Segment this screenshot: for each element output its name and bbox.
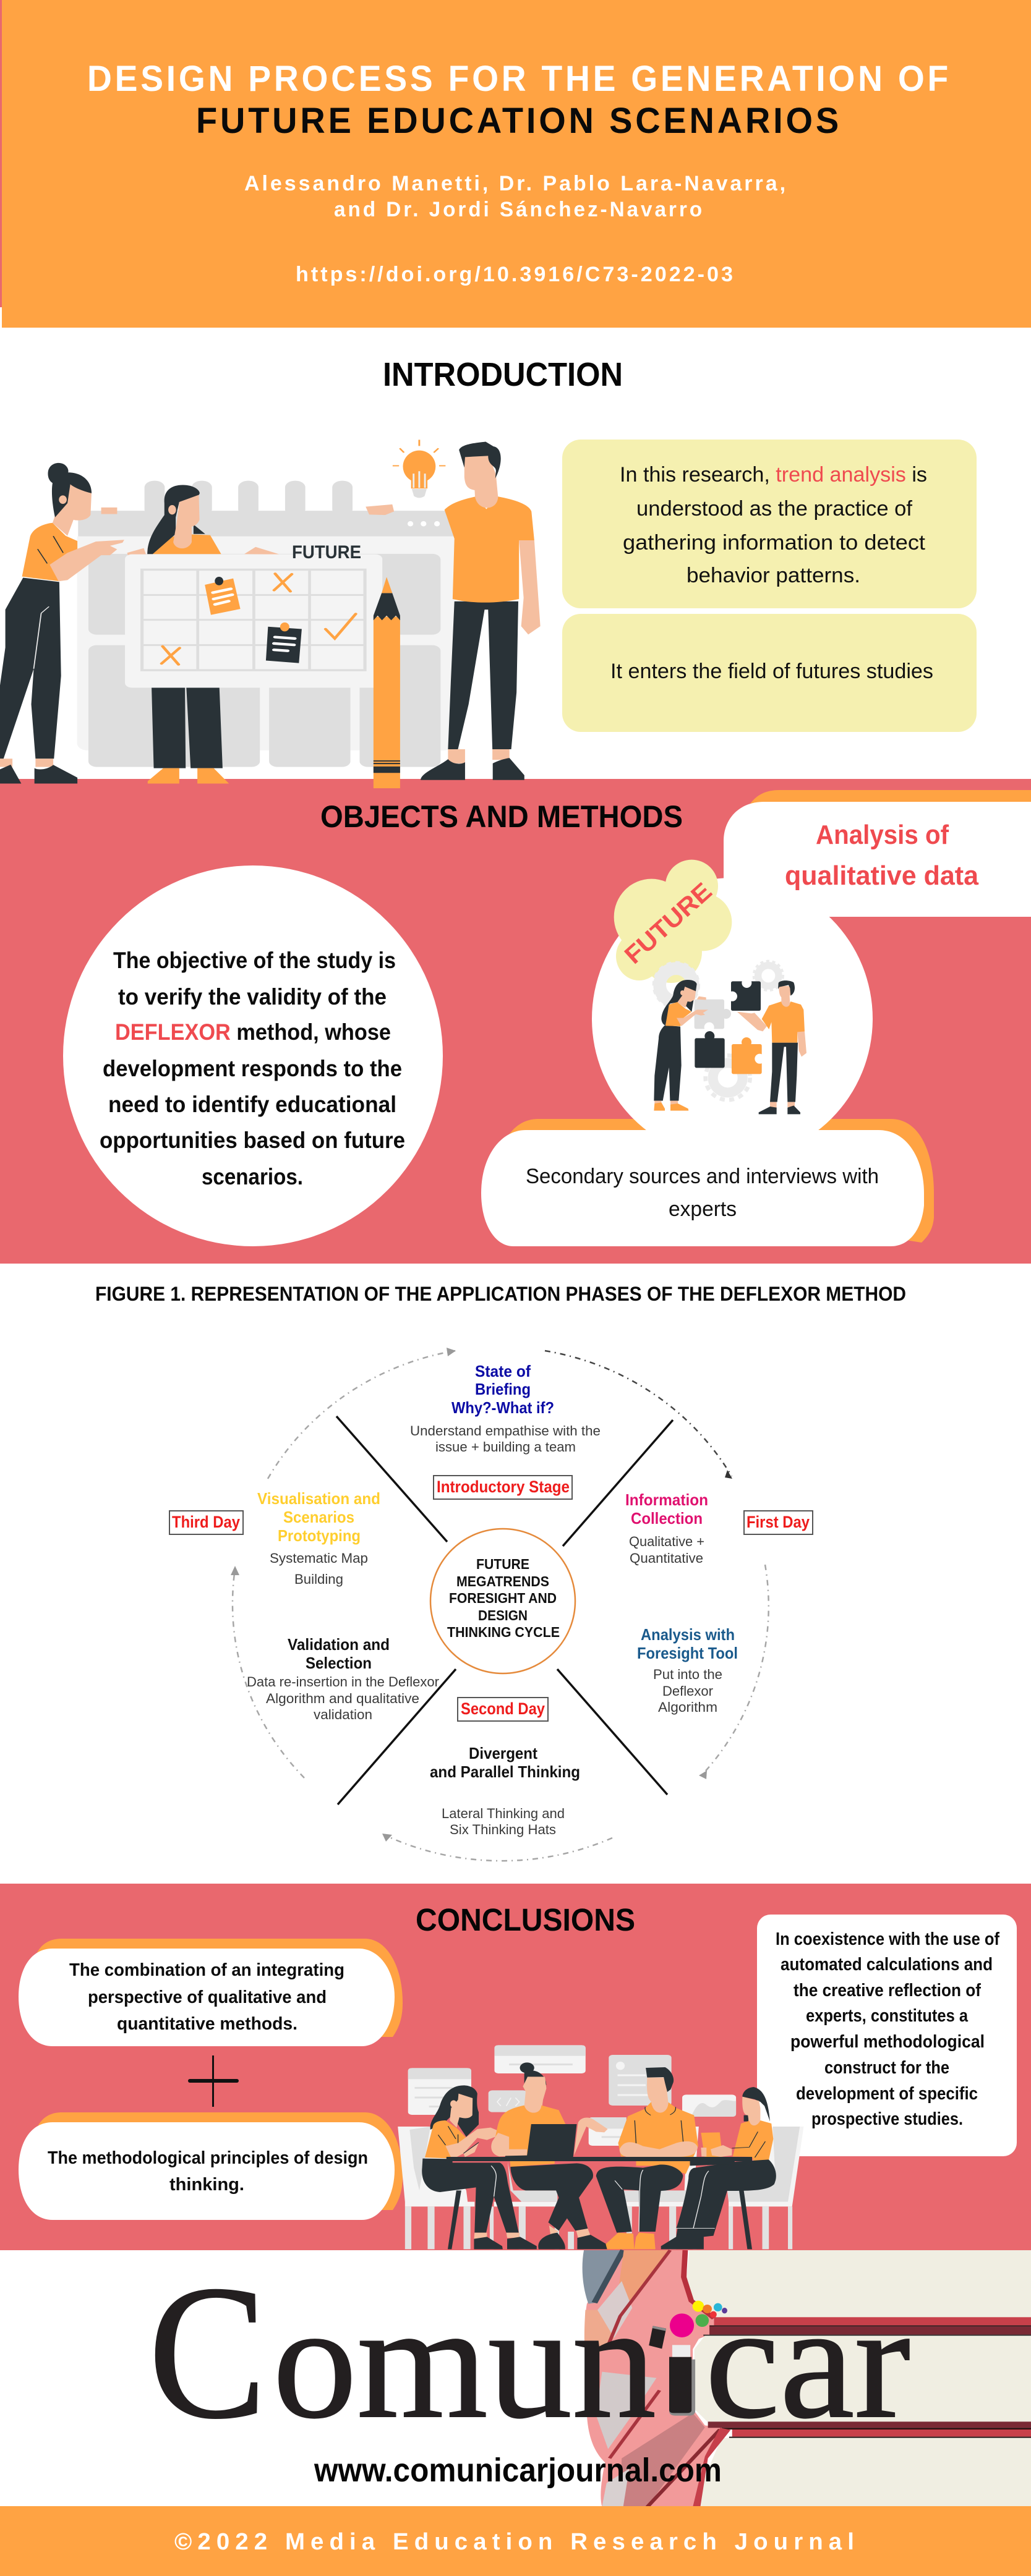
logo: Comunicar: C [148,2247,267,2459]
phase: visualisation and prototyping: Systematic Map [270,1550,368,1566]
calendar label: FUTURE: FUTURE [292,542,361,563]
phase: validation and selection: Data re-insertion in the Deflexor [247,1674,439,1690]
phase: state of briefing [410,1362,601,1455]
person: right woman with phone [661,2087,776,2249]
callout: combination of methods: perspective of qualitative and [88,1987,327,2007]
person: man with hoodie [596,2067,698,2249]
phase: analysis with foresight tool: Foresight Tool [637,1644,738,1662]
logo: Comunicar: omun [273,2271,656,2452]
phase: analysis with foresight tool: Algorithm [658,1699,717,1715]
phase: divergent and parallel thinking: Lateral Thinking and [442,1806,565,1821]
cycle arrows [231,1348,769,1861]
callout: coexistence of calculations and reflection: prospective studies. [811,2109,963,2129]
callout: coexistence of calculations and reflection [757,1915,1017,2156]
panel: bottom card backing [497,1119,934,1243]
pink section background: objects and methods [0,779,1031,1264]
phase: validation and selection: Algorithm and qualitative [266,1691,419,1706]
callout: methodological principles: thinking. [169,2175,244,2195]
phase: validation and selection: Selection [306,1654,372,1672]
center circle: THINKING CYCLE [447,1624,560,1640]
center circle: FUTURE [476,1556,529,1572]
callout: futures studies: It enters the field of futures studies [610,660,933,683]
callout: secondary sources: experts [669,1197,737,1221]
panel: objective circle: need to identify educational [108,1092,396,1117]
title [87,59,951,141]
panel: objective circle [63,865,443,1246]
phase: divergent and parallel thinking: Six Thinking Hats [450,1822,556,1837]
phase: visualisation and prototyping [257,1489,380,1587]
panel: objective circle: The objective of the study is [113,948,396,973]
logo: Comunicar: i [674,2345,695,2427]
chairs [398,2127,803,2249]
conclusions heading: CONCLUSIONS [416,1902,635,1937]
phase: analysis with foresight tool: Deflexor [662,1683,713,1699]
header banner [0,0,1031,328]
callout: analysis of qualitative data [724,790,1031,917]
logo: Comunicar: car [705,2271,910,2452]
person: left woman [422,2085,537,2249]
chart: deflexor method cycle [169,1348,813,1861]
callout: coexistence of calculations and reflection: automated calculations and [781,1955,993,1975]
callout: methodological principles: The methodological principles of design [48,2148,368,2168]
illustration: team meeting at a table [398,2045,803,2249]
footer banner [0,2506,1031,2576]
plus sign [188,2055,239,2107]
person: woman [654,980,708,1111]
cloud label: FUTURE: FUTURE [620,878,717,969]
callout: coexistence of calculations and reflection: development of specific [796,2084,978,2104]
phase: state of briefing: issue + building a team [435,1439,576,1455]
callout: secondary sources: Secondary sources and interviews with [526,1165,879,1188]
phase: state of briefing: Why?-What if? [451,1398,554,1417]
person: second woman with laptop [491,2062,610,2249]
phase: divergent and parallel thinking: Divergent [469,1744,537,1762]
phase: information collection [625,1490,708,1566]
phase: state of briefing: State of [475,1362,531,1380]
logo: Comunicar [148,2247,910,2459]
pink section background: conclusions [0,1884,1031,2250]
person: woman with bun pointing [0,463,124,783]
phase: information collection: Qualitative + [629,1534,704,1549]
doi link: https://doi.org/10.3916/C73-2022-03 [296,263,735,286]
callout: coexistence of calculations and reflection: the creative reflection of [794,1981,981,2000]
callout: trend analysis definition [562,440,977,608]
gears [654,961,783,1100]
callout: futures studies [562,614,977,732]
title: FUTURE EDUCATION SCENARIOS [196,101,842,141]
callout: analysis of qualitative data: Analysis of [816,820,949,850]
callout: coexistence of calculations and reflection: experts, constitutes a [806,2006,969,2026]
floating panels [408,2045,736,2146]
figure caption: FIGURE 1. REPRESENTATION OF THE APPLICATION PHASES OF THE DEFLEXOR METHOD [95,1283,906,1305]
phase: information collection: Information [625,1490,708,1509]
center circle: MEGATRENDS [456,1573,549,1589]
icon: usb stick and colour dots [649,2301,727,2416]
person: man [737,980,806,1114]
callout: combination of methods [19,1939,403,2046]
person: standing man [366,441,541,780]
callout: methodological principles [19,2112,403,2220]
callout: combination of methods: The combination of an integrating [69,1960,344,1980]
person: middle woman legs [148,687,229,783]
introduction heading: INTRODUCTION [383,356,623,393]
callout: combination of methods: quantitative methods. [117,2014,297,2034]
callout: trend analysis definition: In this research, trend analysis is [620,463,927,487]
callout: trend analysis definition: behavior patterns. [687,564,860,587]
authors: and Dr. Jordi Sánchez-Navarro [334,198,704,221]
cloud [614,860,732,983]
callout: trend analysis definition: understood as the practice of [636,497,913,521]
phase: information collection: Quantitative [630,1550,703,1566]
center circle: DESIGN [478,1607,528,1623]
label: introductory stage: Introductory Stage [437,1477,570,1496]
board with planning grid [125,555,382,687]
phase: visualisation and prototyping: Scenarios [283,1508,354,1526]
authors: Alessandro Manetti, Dr. Pablo Lara-Navarra, [244,172,788,195]
website link: www.comunicarjournal.com [314,2452,722,2489]
center circle [430,1529,575,1673]
callout: coexistence of calculations and reflection: In coexistence with the use of [776,1929,999,1949]
footer banner: ©2022 Media Education Research Journal [174,2529,860,2555]
phase: information collection: Collection [631,1509,703,1528]
phase: divergent and parallel thinking: and Parallel Thinking [430,1762,580,1781]
phase: validation and selection: validation [314,1707,372,1722]
title: DESIGN PROCESS FOR THE GENERATION OF [87,59,951,99]
calendar [77,481,455,767]
laptop [505,2124,577,2157]
phase: visualisation and prototyping: Visualisation and [257,1489,380,1508]
phase: state of briefing: Briefing [475,1380,531,1398]
center circle: FORESIGHT AND [449,1590,557,1606]
phase: validation and selection: Validation and [288,1635,390,1654]
dividers [336,1416,673,1804]
pencil [374,577,400,788]
phase: analysis with foresight tool: Analysis with [641,1625,735,1644]
objects and methods heading: OBJECTS AND METHODS [320,799,683,834]
table [447,2157,752,2166]
illustration: team planning at a calendar [0,440,541,788]
icon: light bulb [393,440,445,498]
panel: objective circle: development responds to the [103,1056,402,1081]
phase: validation and selection [247,1635,439,1722]
circle behind puzzle illustration [592,878,873,1160]
callout: trend analysis definition: gathering information to detect [623,531,926,555]
authors [244,172,788,221]
phase: divergent and parallel thinking [430,1744,580,1837]
label: third day: Third Day [172,1513,240,1531]
puzzle pieces [695,978,764,1074]
panel: objective circle: opportunities based on future [100,1128,405,1153]
callout: coexistence of calculations and reflection: powerful methodological [790,2032,985,2052]
illustration: two people with puzzle pieces [614,860,806,1114]
panel: objective circle: scenarios. [202,1164,303,1189]
phase: analysis with foresight tool: Put into the [653,1667,722,1682]
person: woman behind the board [127,485,279,560]
label: first day: First Day [747,1513,810,1531]
image: stack of books [583,2250,1031,2507]
panel: objective circle: DEFLEXOR method, whose [115,1019,391,1045]
phase: state of briefing: Understand empathise with the [410,1423,601,1439]
callout: secondary sources [481,1130,924,1246]
callout: coexistence of calculations and reflection: construct for the [824,2058,949,2078]
callout: analysis of qualitative data: qualitative data [785,861,979,891]
phase: visualisation and prototyping: Prototyping [278,1526,361,1545]
panel: objective circle: to verify the validity of the [118,984,387,1010]
label: second day: Second Day [461,1699,545,1718]
phase: analysis with foresight tool [637,1625,738,1715]
phase: visualisation and prototyping: Building [294,1571,343,1587]
